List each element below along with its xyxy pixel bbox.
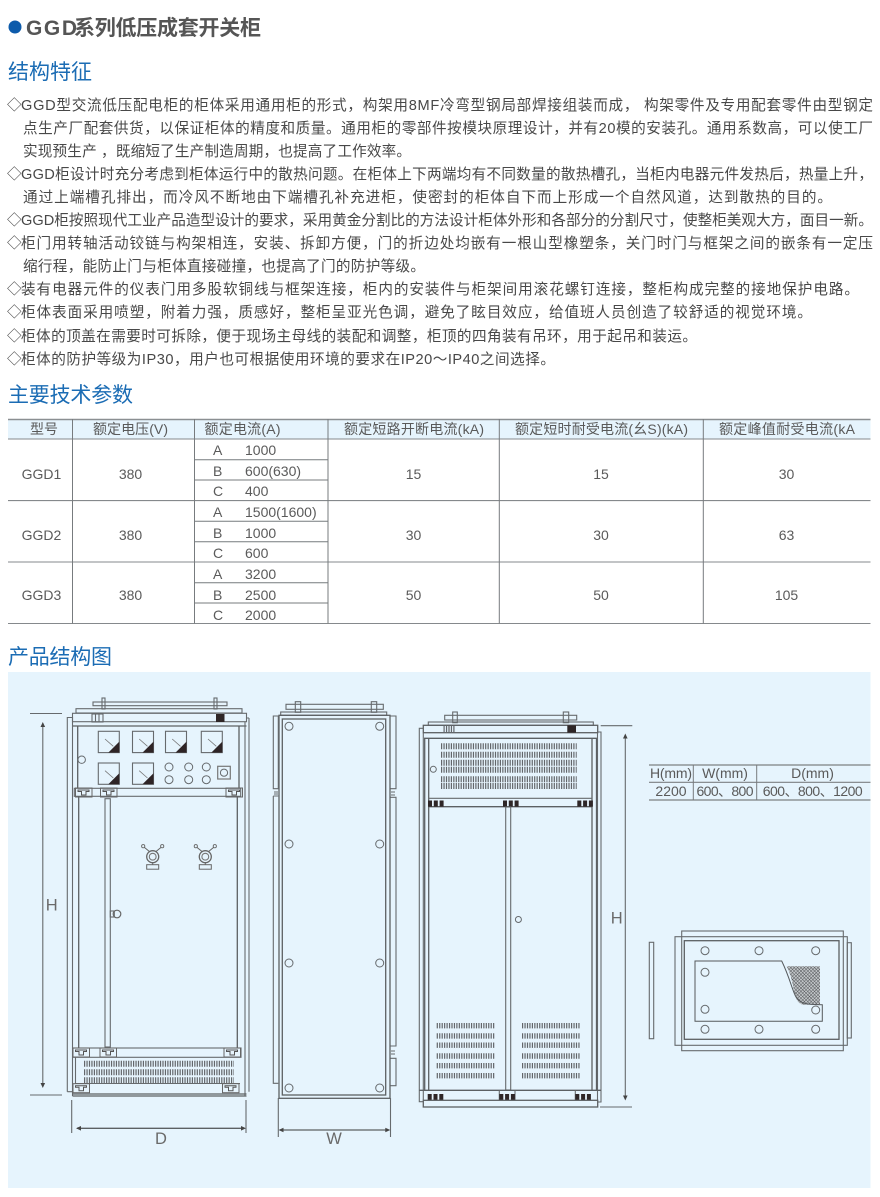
table row GGD2: A <box>213 504 223 520</box>
table header row: 额定电压(V) <box>93 421 168 437</box>
table row GGD2: 30 <box>406 527 421 543</box>
text block: structure feature list: 柜体的防护等级为IP30，用户也可根据使用环境的要求在IP20～IP40之间选择。 <box>21 350 555 368</box>
table row GGD2: 30 <box>593 527 609 543</box>
text block: structure feature list: ◇ <box>7 212 22 229</box>
table header row: 额定短时耐受电流(幺S)(kA) <box>515 421 688 437</box>
table row GGD3: 2000 <box>245 607 276 623</box>
table: dimensions: W(mm) <box>702 765 748 781</box>
text block: structure feature list: 柜体表面采用喷塑，附着力强，质感好，整柜呈亚光色调，避免了眩目效应，给值班人员创造了较舒适的视觉环境。 <box>21 303 812 321</box>
rotary switches <box>142 845 216 869</box>
table: dimensions <box>649 765 870 800</box>
plan view bolt holes <box>701 947 820 1033</box>
table: technical parameters <box>8 419 870 624</box>
text block: structure feature list: 装有电器元件的仪表门用多股软铜线与框架连接，柜内的安装件与柜架间用滚花螺钉连接，整柜构成完整的接地保护电路。 <box>21 281 859 298</box>
text block: structure feature list: 实现预生产 ，既缩短了生产制造周期，也提高了工作效率。 <box>23 143 411 160</box>
diagram: front view cabinet with instruments <box>67 698 249 1096</box>
mounting holes <box>285 722 384 1092</box>
table row GGD3: 105 <box>775 587 798 603</box>
table row GGD3: A <box>213 566 223 582</box>
dimension: H front: H <box>46 896 58 914</box>
dimension: H rear: H <box>611 910 623 928</box>
text block: structure feature list: 点生产厂配套供货，以保证柜体的精度和质量。通用柜的零部件按模块原理设计，并有20模的安装孔。通用系数高，可以使工厂 <box>23 120 873 137</box>
table row GGD2: 1500(1600) <box>245 504 317 520</box>
table row GGD3: 3200 <box>245 566 276 582</box>
table row GGD1: C <box>213 483 223 499</box>
table header row: 额定短路开断电流(kA) <box>344 421 484 437</box>
indicator lamps and knob <box>78 756 230 784</box>
text block: structure feature list <box>7 96 873 368</box>
table: dimensions: 600、800、1200 <box>763 783 863 799</box>
table: dimensions: H(mm) <box>650 765 692 781</box>
table row GGD1: B <box>213 463 222 479</box>
door clips <box>428 800 593 807</box>
text block: structure feature list: ◇ <box>7 166 22 183</box>
table header row: 型号 <box>30 421 58 437</box>
text block: structure feature list: 缩行程，能防止门与柜体直接碰撞，也提高了门的防护等级。 <box>23 257 425 275</box>
dimension: W: W <box>326 1130 342 1148</box>
title: GGD series: GGD <box>26 17 79 40</box>
table: dimensions: 2200 <box>655 783 687 799</box>
text block: structure feature list: ◇ <box>7 235 22 252</box>
table header row: 额定峰值耐受电流(kA <box>719 421 856 437</box>
table row GGD1 <box>22 442 794 499</box>
heading: structure features: 结构特征 <box>8 61 92 84</box>
title: GGD series: 系列低压成套开关柜 <box>74 16 261 40</box>
text block: structure feature list: ◇ <box>7 351 22 368</box>
lower vents <box>437 1026 580 1076</box>
table header row: 额定电流(A) <box>204 421 280 437</box>
table row GGD2: GGD2 <box>22 527 62 543</box>
table row GGD2: 63 <box>779 527 794 543</box>
text block: structure feature list: 柜门用转轴活动铰链与构架相连，安装、拆卸方便，门的折边处均嵌有一根山型橡塑条，关门时门与框架之间的嵌条有一定压 <box>21 234 873 252</box>
diagram: side view cabinet <box>273 702 396 1098</box>
table header row <box>30 421 856 437</box>
dimension: D <box>72 1100 246 1148</box>
text block: structure feature list: ◇ <box>7 97 22 114</box>
text block: structure feature list: 通过上端槽孔排出，而冷风不断地由下端槽孔补充进柜，使密封的柜体自下而上形成一个自然风道，达到散热的目的。 <box>23 189 832 206</box>
heading: main technical parameters: 主要技术参数 <box>8 384 133 407</box>
dimension: H front <box>30 714 62 1095</box>
text block: structure feature list: ◇ <box>7 281 22 298</box>
table row GGD1: GGD1 <box>22 466 62 482</box>
table: dimensions: 600、800 <box>696 783 754 799</box>
table row GGD1: 15 <box>593 466 609 482</box>
text block: structure feature list: GGD柜设计时充分考虑到柜体运行中的散热问题。在柜体上下两端均有不同数量的散热槽孔，当柜内电器元件发热后，热量上升， <box>21 166 873 183</box>
text block: structure feature list: GGD柜按照现代工业产品造型设计的要求，采用黄金分割比的方法设计柜体外形和各部分的分割尺寸，使整柜美观大方，面目一新。 <box>21 212 873 229</box>
text block: structure feature list: GGD型交流低压配电柜的柜体采用通用柜的形式，构架用8MF冷弯型钢局部焊接组装而成， 构架零件及专用配套零件由型钢定 <box>21 96 873 114</box>
heading: product structure diagram: 产品结构图 <box>8 646 112 669</box>
table row GGD3 <box>22 566 798 623</box>
text block: structure feature list: 柜体的顶盖在需要时可拆除，便于现场主母线的装配和调整，柜顶的四角装有吊环，用于起吊和装运。 <box>21 328 697 345</box>
dimension: D: D <box>155 1130 167 1148</box>
table row GGD1: A <box>213 442 223 458</box>
table row GGD3: B <box>213 587 222 603</box>
text block: structure feature list: ◇ <box>7 328 22 345</box>
table row GGD2 <box>22 504 794 561</box>
table row GGD1: 400 <box>245 483 269 499</box>
upper vents <box>441 746 577 786</box>
table row GGD3: GGD3 <box>22 587 62 603</box>
table row GGD1: 380 <box>119 466 142 482</box>
instrument meters <box>98 731 222 784</box>
panel: structure diagram background <box>8 672 870 1188</box>
table row GGD3: 2500 <box>245 587 276 603</box>
table row GGD2: C <box>213 545 223 561</box>
diagram: rear view cabinet with vents <box>419 712 601 1107</box>
table row GGD3: 50 <box>593 587 609 603</box>
table row GGD1: 15 <box>406 466 421 482</box>
diagram: plan view <box>649 931 851 1051</box>
table row GGD3: 380 <box>119 587 142 603</box>
table row GGD1: 1000 <box>245 442 276 458</box>
table row GGD2: 1000 <box>245 525 276 541</box>
table: dimensions: D(mm) <box>791 765 834 781</box>
text block: structure feature list: ◇ <box>7 304 22 321</box>
table row GGD1: 600(630) <box>245 463 301 479</box>
table row GGD2: 600 <box>245 545 269 561</box>
plan view cutaway <box>695 961 822 1021</box>
base vents <box>84 1064 234 1080</box>
table row GGD2: 380 <box>119 527 142 543</box>
table row GGD2: B <box>213 525 222 541</box>
table row GGD3: C <box>213 607 223 623</box>
handle <box>110 910 121 918</box>
dimension: H rear <box>600 726 632 1107</box>
table row GGD3: 50 <box>406 587 421 603</box>
dimension: W <box>278 1098 390 1148</box>
table row GGD1: 30 <box>779 466 794 482</box>
